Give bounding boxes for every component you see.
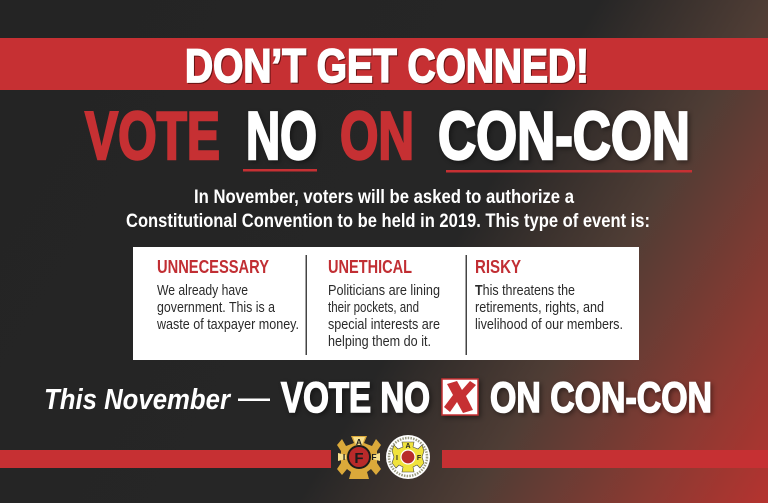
column: unnecessary: UNNECESSARY: [157, 256, 270, 277]
main headline: [85, 98, 690, 174]
column: unethical: their pockets, and: [328, 299, 419, 316]
icon: state association logo: I: [396, 455, 398, 462]
bottom red bar right: [442, 450, 768, 468]
column: unethical: [328, 256, 440, 350]
icon: IAFF gold logo: [337, 436, 381, 479]
intro text: In November, voters will be asked to authorize a: [194, 187, 574, 208]
em dash: [238, 398, 270, 401]
call to action: This November: [44, 384, 232, 416]
main headline: ON: [340, 98, 414, 174]
divider: [466, 255, 467, 355]
underline: NO: [243, 169, 317, 172]
icon: red X ballot box: [442, 379, 478, 415]
intro text: Constitutional Convention to be held in 2019. This type of event is:: [126, 211, 650, 232]
column: unnecessary: [156, 256, 299, 333]
icon: state association logo: [386, 435, 430, 479]
main headline: NO: [246, 98, 317, 174]
column: unnecessary: We already have: [157, 282, 248, 299]
banner heading: DON’T GET CONNED!: [185, 39, 589, 92]
icon: state association logo: A: [405, 443, 411, 450]
column: unnecessary: waste of taxpayer money.: [156, 316, 299, 333]
column: unnecessary: government. This is a: [157, 299, 276, 316]
bottom red bar left: [0, 450, 331, 468]
icon: IAFF gold logo: I: [343, 452, 345, 462]
column: risky: [475, 256, 623, 333]
column: unethical: special interests are: [328, 316, 440, 333]
column: risky: RISKY: [475, 256, 522, 277]
column: unethical: UNETHICAL: [328, 256, 412, 277]
icon: IAFF gold logo: F: [371, 452, 377, 462]
icon: state association logo: F: [417, 455, 422, 462]
main headline: VOTE: [85, 98, 220, 174]
icon: IAFF gold logo: A: [356, 437, 362, 447]
column: unethical: Politicians are lining: [328, 282, 440, 299]
top red banner: [0, 38, 768, 90]
divider: [306, 255, 307, 355]
column: risky: This threatens the: [475, 282, 575, 299]
column: risky: livelihood of our members.: [475, 316, 623, 333]
underline: CON-CON: [446, 170, 692, 172]
main headline: CON-CON: [438, 98, 690, 174]
icon: IAFF gold logo: F: [354, 450, 364, 467]
call to action: ON CON-CON: [490, 374, 712, 422]
column: unethical: helping them do it.: [328, 333, 431, 350]
call to action: VOTE NO: [281, 374, 430, 422]
column: risky: retirements, rights, and: [475, 299, 604, 316]
call to action: [44, 374, 712, 422]
intro text: [126, 187, 650, 232]
panel: three reasons: [133, 247, 639, 360]
